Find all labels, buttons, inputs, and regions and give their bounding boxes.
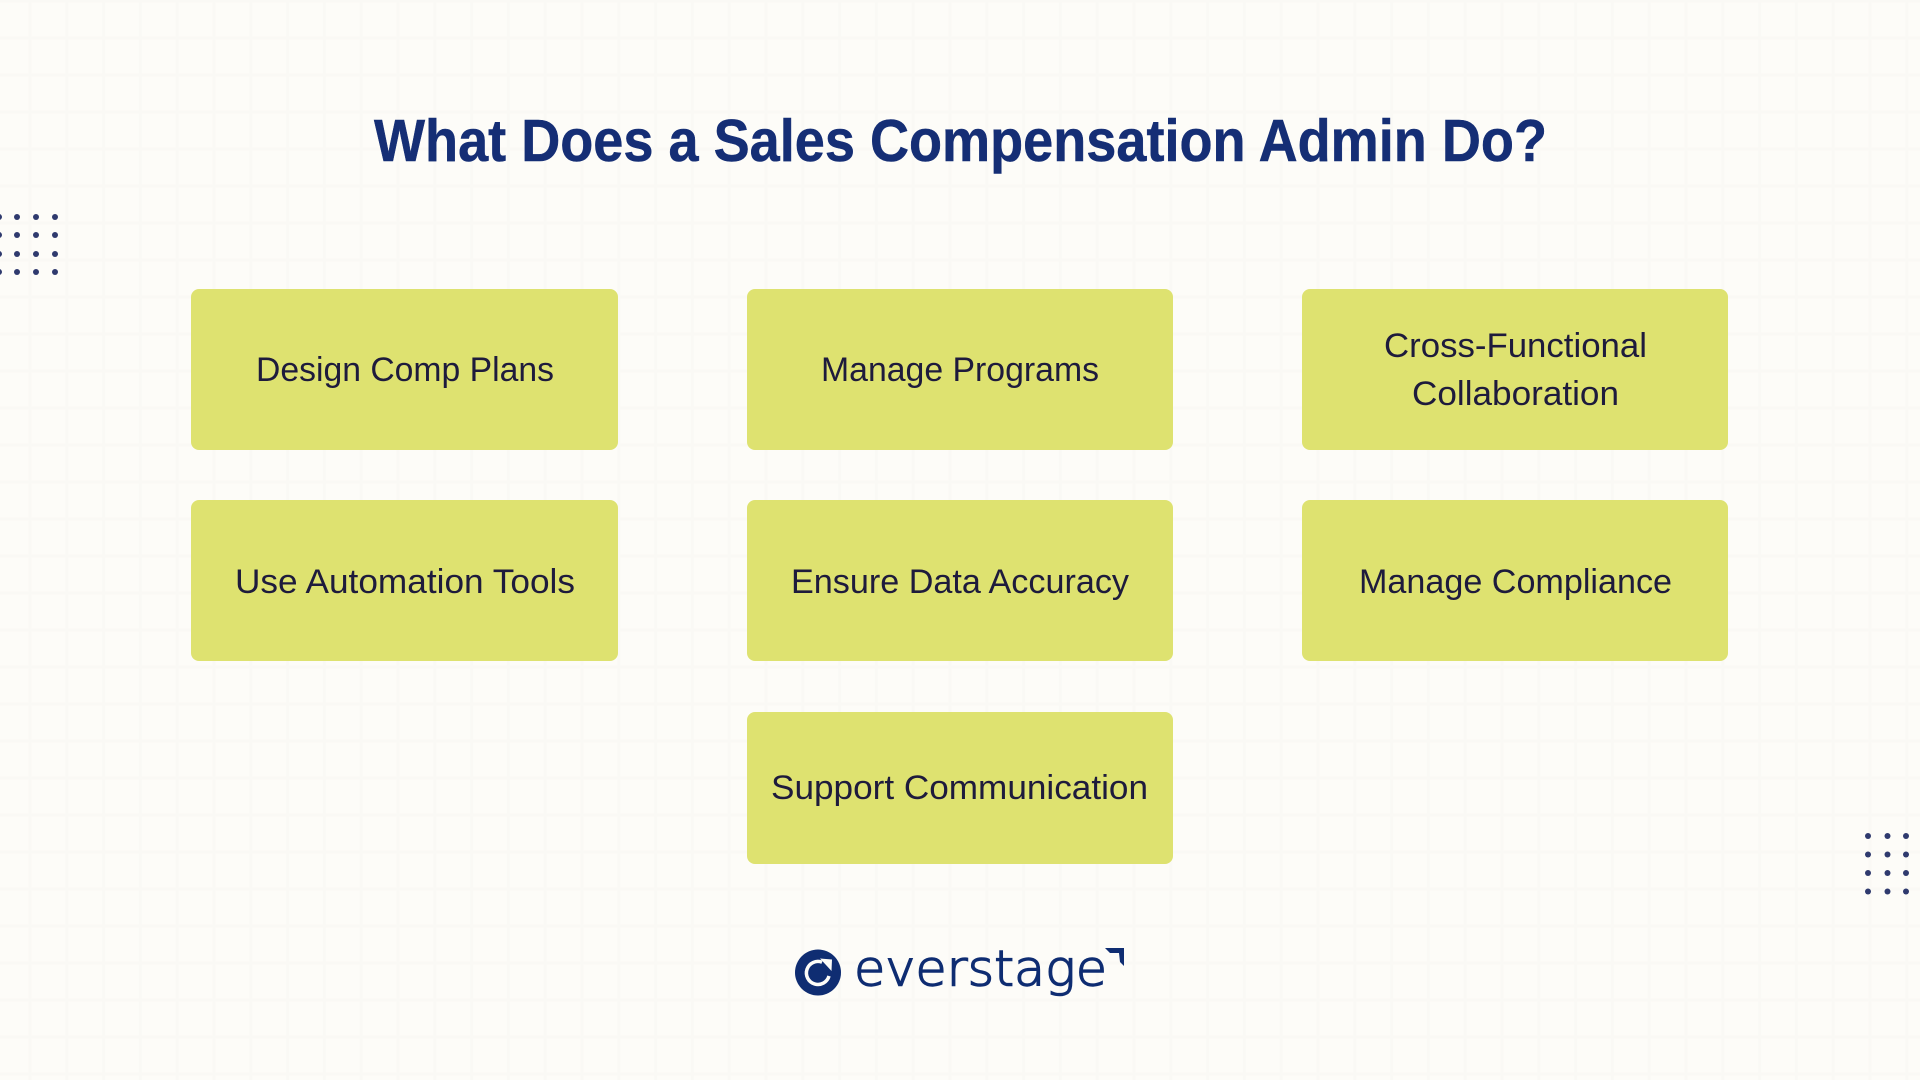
card: Use Automation Tools [191,500,618,661]
card: Cross-Functional Collaboration: Cross-Functional [1384,327,1647,365]
card: Design Comp Plans: Design Comp Plans [256,351,554,389]
card: Manage Compliance [1302,500,1728,661]
card: Manage Programs [747,289,1173,450]
logo: everstage [795,940,1124,998]
card: Ensure Data Accuracy: Ensure Data Accuracy [791,563,1129,601]
card: Cross-Functional Collaboration: Collaboration [1412,375,1619,413]
card: Ensure Data Accuracy [747,500,1173,661]
card: Design Comp Plans [191,289,618,450]
card: Manage Programs: Manage Programs [821,351,1099,389]
logo corner accent [1105,948,1124,966]
card: Cross-Functional Collaboration [1302,289,1728,450]
logo wordmark: everstage [854,940,1107,998]
title: What Does a Sales Compensation Admin Do? [374,108,1547,174]
card: Use Automation Tools: Use Automation Tools [235,563,575,601]
card: Support Communication [747,712,1173,864]
decorative dot grid: bottom right [1865,833,1909,894]
decorative dot grid: top left [0,214,58,275]
icon: everstage mark [795,950,841,996]
card: Support Communication: Support Communication [771,769,1148,807]
card: Manage Compliance: Manage Compliance [1359,563,1672,601]
